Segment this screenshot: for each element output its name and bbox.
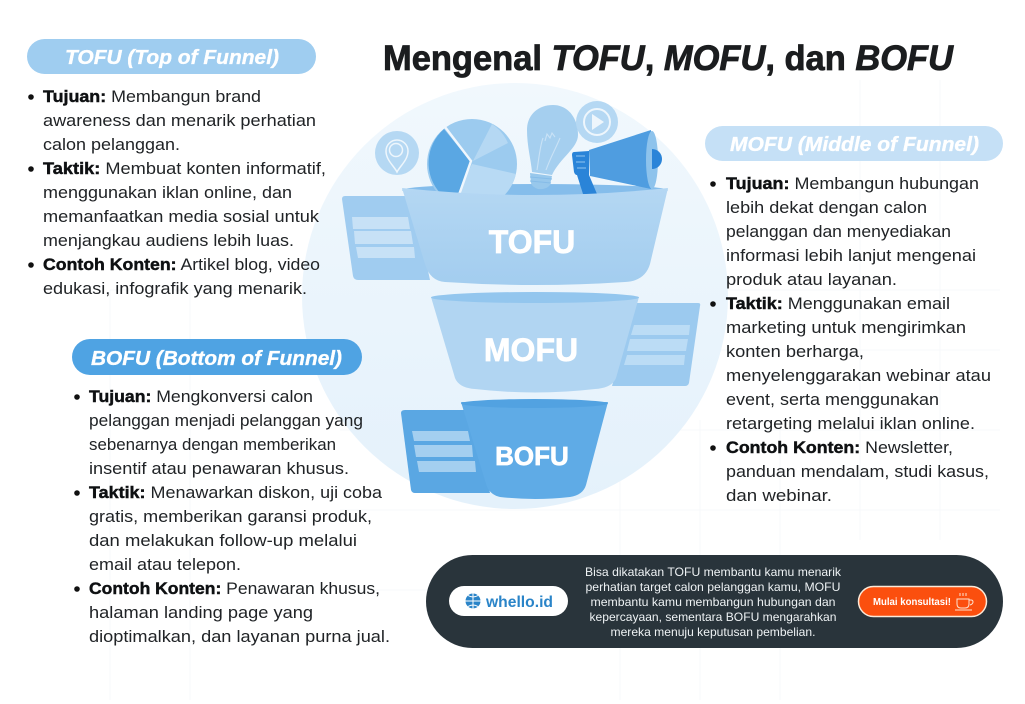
panel: MOFU card [612,303,700,386]
BOFU bullet list [74,387,390,646]
TOFU bullet list: awareness dan menarik perhatian [43,111,316,130]
MOFU bullet list: event, serta menggunakan [726,390,939,409]
icon: megaphone [572,130,662,194]
BOFU bullet list: sebenarnya dengan memberikan [89,435,336,454]
MOFU bullet list: panduan mendalam, studi kasus, [726,462,989,481]
BOFU bullet list: dioptimalkan, dan layanan purna jual. [89,627,390,646]
title: Mengenal TOFU, MOFU, dan BOFU [383,39,954,78]
TOFU bullet list: calon pelanggan. [43,135,180,154]
MOFU bullet list: menyelenggarakan webinar atau [726,366,991,385]
funnel: TOFU: TOFU [489,224,575,260]
BOFU heading pill [72,339,362,375]
TOFU heading pill [27,39,316,74]
BOFU bullet list: Tujuan: Mengkonversi calon [89,387,313,406]
logo pill: whello.id [485,594,553,611]
funnel rim: TOFU [402,184,668,196]
TOFU bullet list: edukasi, infografik yang menarik. [43,279,307,298]
MOFU bullet list: Tujuan: Membangun hubungan [726,174,979,193]
TOFU heading pill: TOFU (Top of Funnel) [65,47,279,69]
MOFU bullet list: pelanggan dan menyediakan [726,222,951,241]
summary text: membantu kamu membangun hubungan dan [590,595,836,609]
MOFU bullet list: marketing untuk mengirimkan [726,318,966,337]
MOFU bullet list [710,174,991,505]
MOFU heading pill: MOFU (Middle of Funnel) [730,134,979,156]
TOFU bullet list: memanfaatkan media sosial untuk [43,207,320,226]
MOFU bullet list: dan webinar. [726,486,832,505]
funnel: MOFU [431,292,639,392]
MOFU heading pill [705,126,1003,161]
MOFU bullet list: konten berharga, [726,342,864,361]
panel: TOFU description [27,39,326,298]
panel: bottom summary bar [426,555,1003,648]
BOFU heading pill: BOFU (Bottom of Funnel) [91,348,342,370]
BOFU bullet list: pelanggan menjadi pelanggan yang [89,411,363,430]
summary text: mereka menuju keputusan pembelian. [610,625,816,639]
logo pill [449,586,568,616]
BOFU bullet list: dan melakukan follow-up melalui [89,531,357,550]
BOFU bullet list: insentif atau penawaran khusus. [89,459,349,478]
summary text: perhatian target calon pelanggan kamu, MOFU [586,580,840,594]
MOFU bullet list: produk atau layanan. [726,270,897,289]
BOFU bullet list: Contoh Konten: Penawaran khusus, [89,579,380,598]
summary text: kepercayaan, sementara BOFU mengarahkan [590,610,836,624]
TOFU bullet list: Contoh Konten: Artikel blog, video [43,255,320,274]
icon: map pin [375,131,419,175]
TOFU bullet list [28,87,326,298]
BOFU bullet list: gratis, memberikan garansi produk, [89,507,372,526]
icon: play button [576,101,618,143]
TOFU bullet list: Tujuan: Membangun brand [43,87,261,106]
MOFU bullet list: Taktik: Menggunakan email [726,294,950,313]
funnel: BOFU [461,399,608,499]
funnel: MOFU: MOFU [484,332,578,368]
summary text [585,565,842,639]
icon: light bulb [527,105,578,189]
MOFU bullet list: lebih dekat dengan calon [726,198,927,217]
BOFU bullet list: email atau telepon. [89,555,241,574]
background circle [302,83,728,509]
TOFU bullet list: menjangkau audiens lebih luas. [43,231,294,250]
BOFU bullet list: Taktik: Menawarkan diskon, uji coba [89,483,383,502]
TOFU bullet list: menggunakan iklan online, dan [43,183,292,202]
funnel: TOFU [402,188,668,285]
MOFU bullet list: Contoh Konten: Newsletter, [726,438,953,457]
CTA button: Mulai konsultasi! [873,596,951,608]
MOFU bullet list: informasi lebih lanjut mengenai [726,246,976,265]
panel: BOFU description [72,339,390,646]
funnel: BOFU: BOFU [495,441,569,471]
icon: pie chart [427,119,517,209]
panel: BOFU card [401,410,490,493]
panel: TOFU card [342,196,430,280]
MOFU bullet list: retargeting melalui iklan online. [726,414,975,433]
TOFU bullet list: Taktik: Membuat konten informatif, [43,159,326,178]
CTA button [858,586,986,616]
BOFU bullet list: halaman landing page yang [89,603,313,622]
panel: MOFU description [705,126,1003,505]
summary text: Bisa dikatakan TOFU membantu kamu menarik [585,565,842,579]
